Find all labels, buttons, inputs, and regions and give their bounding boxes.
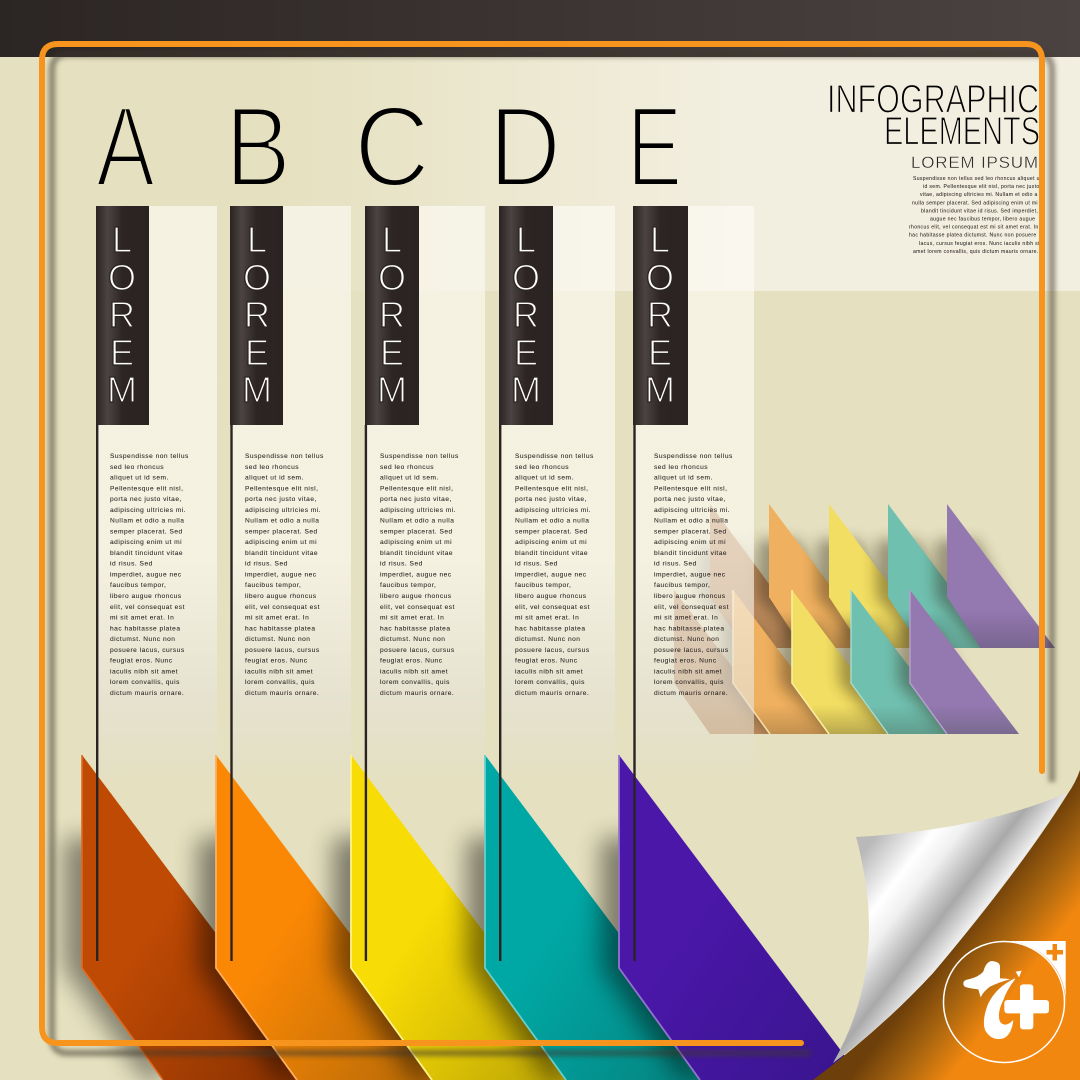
ribbon: column D teal [467,755,729,1080]
intro paragraph: nulla semper placerat. Sed adipiscing enim ut mi [912,200,1038,206]
body text: column C: porta nec justo vitae, [380,496,452,503]
body text: column E: blandit tincidunt vitae [654,550,727,557]
body text: column E: adipiscing ultricies mi. [654,507,730,514]
body text: column E: adipiscing enim ut mi [654,539,726,546]
body text: column A: imperdiet, augue nec [110,571,182,578]
letter heading: E: E [627,83,682,211]
body text: column B: feugiat eros. Nunc [245,658,308,665]
intro paragraph: rhoncus elit, vel consequat est mi sit amet erat. In [909,225,1039,231]
body text: column B: posuere lacus, cursus [245,647,320,654]
body text: column B: aliquet ut id sem. [245,475,304,482]
body text: column A: feugiat eros. Nunc [110,658,173,665]
top dark bar [0,0,1080,57]
body text: column C: blandit tincidunt vitae [380,550,453,557]
body text: column D: Nullam et odio a nulla [515,518,589,525]
logo badge [944,941,1066,1062]
column A label bar [96,206,149,425]
body text: column A: hac habitasse platea [110,625,180,632]
body text: column A: aliquet ut id sem. [110,475,169,482]
body text: column D: semper placerat. Sed [515,528,588,535]
body text: column E: porta nec justo vitae, [654,496,726,503]
body text: column E: libero augue rhoncus [654,593,726,600]
body text: column A: porta nec justo vitae, [110,496,182,503]
body text: column B: Suspendisse non tellus [245,453,324,460]
body text: column C: elit, vel consequat est [380,604,455,611]
column A label bar: LOREM [107,219,137,410]
body text: column D: feugiat eros. Nunc [515,658,578,665]
body text: column A: semper placerat. Sed [110,528,183,535]
body text: column D: adipiscing enim ut mi [515,539,587,546]
ribbon: column B orange [198,755,460,1080]
body text: column E: posuere lacus, cursus [654,647,729,654]
body text: column D: Suspendisse non tellus [515,453,594,460]
ribbon: column A red [64,755,326,1080]
intro paragraph: blandit tincidunt vitae id risus. Sed imperdiet, [921,208,1038,214]
body text: column E: sed leo rhoncus [654,464,708,471]
body text: column D: sed leo rhoncus [515,464,569,471]
body text: column E: Nullam et odio a nulla [654,518,728,525]
body text: column C: id risus. Sed [380,561,423,568]
letter heading: A: A [96,83,155,211]
body text: column E: feugiat eros. Nunc [654,658,717,665]
body text: column D: dictumst. Nunc non [515,636,580,643]
body text: column B: Pellentesque elit nisl, [245,485,318,492]
body text: column A: Suspendisse non tellus [110,453,189,460]
body text: column A: dictumst. Nunc non [110,636,175,643]
body text: column E: dictum mauris ornare. [654,690,728,697]
body text: column D: faucibus tempor, [515,582,571,589]
body text: column C: aliquet ut id sem. [380,475,439,482]
panel: column C [365,206,485,790]
body text: column A: adipiscing enim ut mi [110,539,182,546]
body text: column E: dictumst. Nunc non [654,636,719,643]
logo: white corner [1004,941,1066,1002]
body text: column D: id risus. Sed [515,561,558,568]
body text: column E: semper placerat. Sed [654,528,727,535]
body text: column E: Pellentesque elit nisl, [654,485,727,492]
body text: column E: lorem convallis, quis [654,679,724,686]
body text: column C: dictumst. Nunc non [380,636,445,643]
body text: column E: iaculis nibh sit amet [654,668,722,675]
body text: column A: blandit tincidunt vitae [110,550,183,557]
body text: column B: hac habitasse platea [245,625,316,632]
column C label bar [365,206,419,425]
panel: column E [633,206,754,790]
panel: column D [499,206,615,790]
body text: column D: porta nec justo vitae, [515,496,587,503]
body text: column E: Suspendisse non tellus [654,453,733,460]
vertical line: column B [230,425,233,961]
panel: column A [96,206,217,790]
body text: column B: id risus. Sed [245,561,288,568]
body text: column B: semper placerat. Sed [245,528,318,535]
body text: column C: Pellentesque elit nisl, [380,485,453,492]
body text: column D: elit, vel consequat est [515,604,590,611]
body text: column B: dictum mauris ornare. [245,690,319,697]
intro paragraph: augue nec faucibus tempor, libero augue [930,216,1035,222]
intro paragraph: amet lorem convallis, quis dictum mauris ornare. [913,249,1039,255]
page curl: exposed orange corner [813,770,1080,1080]
body text: column B: dictumst. Nunc non [245,636,310,643]
body text: column B: imperdiet, augue nec [245,571,317,578]
body text: column C: feugiat eros. Nunc [380,658,443,665]
vertical line: column C [365,425,367,961]
column D label bar [499,206,553,425]
column E label bar: LOREM [645,219,675,410]
body text: column C: adipiscing ultricies mi. [380,507,456,514]
ribbon: column E purple [601,755,863,1080]
column D label bar: LOREM [511,219,541,410]
title block [827,78,1042,255]
body text: column B: lorem convallis, quis [245,679,315,686]
column E label bar [633,206,688,425]
body text: column A: mi sit amet erat. In [110,615,174,622]
body text: column B: adipiscing ultricies mi. [245,507,321,514]
body text: column B: porta nec justo vitae, [245,496,317,503]
page curl: silver fold [833,793,1067,1063]
logo: small plus [1046,944,1063,960]
body text: column B: adipiscing enim ut mi [245,539,317,546]
intro paragraph: Suspendisse non tellus sed leo rhoncus aliquet ut [913,176,1042,182]
body text: column A: posuere lacus, cursus [110,647,185,654]
body text: column C: lorem convallis, quis [380,679,450,686]
body text: column C: libero augue rhoncus [380,593,452,600]
body text: column C: posuere lacus, cursus [380,647,455,654]
column C label bar: LOREM [377,219,407,410]
intro paragraph: vitae, adipiscing ultricies mi. Nullam et odio a [920,192,1038,198]
body text: column E: aliquet ut id sem. [654,475,713,482]
letter heading: D: D [489,83,561,211]
intro paragraph: id sem. Pellentesque elit nisl, porta nec justo [923,184,1040,190]
small shapes: front row [674,590,1019,734]
vertical line: column E [633,425,636,961]
body text: column A: Nullam et odio a nulla [110,518,184,525]
body text: column A: adipiscing ultricies mi. [110,507,186,514]
body text: column A: id risus. Sed [110,561,153,568]
body text: column E: faucibus tempor, [654,582,710,589]
body text: column B: libero augue rhoncus [245,593,317,600]
body text: column E: imperdiet, augue nec [654,571,726,578]
body text: column D: lorem convallis, quis [515,679,585,686]
body text: column C: sed leo rhoncus [380,464,434,471]
body text: column B: sed leo rhoncus [245,464,299,471]
body text: column D: imperdiet, augue nec [515,571,587,578]
body text: column B: elit, vel consequat est [245,604,320,611]
body text: column C: Suspendisse non tellus [380,453,459,460]
column B label bar: LOREM [242,219,272,410]
body text: column B: faucibus tempor, [245,582,301,589]
body text: column A: elit, vel consequat est [110,604,185,611]
body text: column C: imperdiet, augue nec [380,571,452,578]
body text: column D: blandit tincidunt vitae [515,550,588,557]
body text: column D: mi sit amet erat. In [515,615,579,622]
ribbon: column C yellow [333,755,595,1080]
body text: column C: adipiscing enim ut mi [380,539,452,546]
column B label bar [230,206,283,425]
body text: column A: dictum mauris ornare. [110,690,184,697]
body text: column A: sed leo rhoncus [110,464,164,471]
body text: column D: posuere lacus, cursus [515,647,590,654]
body text: column D: Pellentesque elit nisl, [515,485,588,492]
body text: column C: semper placerat. Sed [380,528,453,535]
body text: column E: id risus. Sed [654,561,697,568]
body text: column D: dictum mauris ornare. [515,690,589,697]
body text: column A: libero augue rhoncus [110,593,182,600]
letter heading: C: C [354,83,430,211]
body text: column C: mi sit amet erat. In [380,615,444,622]
body text: column E: elit, vel consequat est [654,604,729,611]
intro paragraph: lacus, cursus feugiat eros. Nunc iaculis nibh sit [919,241,1042,247]
body text: column A: iaculis nibh sit amet [110,668,178,675]
body text: column D: iaculis nibh sit amet [515,668,583,675]
intro paragraph: hac habitasse platea dictumst. Nunc non posuere [909,233,1037,239]
panel: column B [230,206,351,790]
body text: column C: iaculis nibh sit amet [380,668,448,675]
logo: t plus mark [963,961,1049,1039]
body text: column B: blandit tincidunt vitae [245,550,318,557]
body text: column B: iaculis nibh sit amet [245,668,313,675]
letter heading: B: B [225,83,291,211]
body text: column C: dictum mauris ornare. [380,690,454,697]
logo: circle outline [944,942,1064,1062]
body text: column D: hac habitasse platea [515,625,586,632]
body text: column D: adipiscing ultricies mi. [515,507,591,514]
body text: column D: libero augue rhoncus [515,593,587,600]
body text: column A: lorem convallis, quis [110,679,180,686]
body text: column E: mi sit amet erat. In [654,615,718,622]
body text: column C: faucibus tempor, [380,582,436,589]
body text: column B: mi sit amet erat. In [245,615,309,622]
body text: column C: Nullam et odio a nulla [380,518,454,525]
small shapes: back row [697,504,1058,652]
body text: column D: aliquet ut id sem. [515,475,574,482]
body text: column C: hac habitasse platea [380,625,450,632]
vertical line: column D [499,425,501,961]
body text: column E: hac habitasse platea [654,625,724,632]
background: upper light band [0,57,1080,291]
body text: column B: Nullam et odio a nulla [245,518,319,525]
vertical line: column A [96,425,98,961]
body text: column A: Pellentesque elit nisl, [110,485,183,492]
body text: column A: faucibus tempor, [110,582,166,589]
subtitle: LOREM IPSUM [911,153,1038,172]
